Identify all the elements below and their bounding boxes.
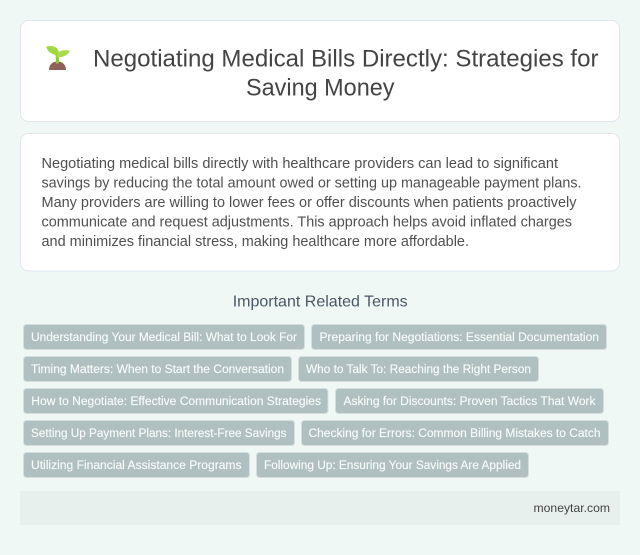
tag: how to negotiate: How to Negotiate: Effective Communication Strategies [31, 394, 321, 408]
tag: timing matters: Timing Matters: When to Start the Conversation [31, 362, 284, 376]
tag: how to negotiate [24, 388, 328, 414]
footer [20, 491, 620, 525]
tag: checking for errors: Checking for Errors: Common Billing Mistakes to Catch [308, 426, 601, 440]
tag: who to talk to: Who to Talk To: Reaching the Right Person [306, 362, 531, 376]
tag: understanding your bill: Understanding Your Medical Bill: What to Look For [31, 330, 297, 344]
tag: financial assistance [24, 452, 250, 478]
tag: preparing for negotiations: Preparing for Negotiations: Essential Documentation [320, 330, 599, 344]
panel: header [20, 20, 620, 122]
heading: related terms: Important Related Terms [233, 294, 408, 310]
title [93, 46, 599, 102]
tag: checking for errors [302, 420, 608, 446]
panel: summary text: Negotiating medical bills directly with healthcare providers can lead to significant [42, 156, 558, 172]
tag: financial assistance: Utilizing Financial Assistance Programs [31, 458, 242, 472]
tag: payment plans: Setting Up Payment Plans: Interest-Free Savings [31, 426, 286, 440]
tag: who to talk to [298, 356, 538, 382]
tag: following up [256, 452, 528, 478]
icon: seedling [46, 46, 70, 70]
panel: summary text: communicate and request adjustments. This approach helps avoid inflated charges [42, 214, 572, 230]
tag: asking for discounts [336, 388, 604, 414]
panel: summary text: Many providers are willing to lower fees or offer discounts when patients proactively [42, 195, 577, 211]
tag: timing matters [24, 356, 292, 382]
tag: asking for discounts: Asking for Discounts: Proven Tactics That Work [344, 394, 596, 408]
title: Saving Money [246, 74, 394, 102]
panel: summary text: and minimizes financial stress, making healthcare more affordable. [42, 234, 469, 250]
panel: summary text [20, 134, 620, 271]
title: Negotiating Medical Bills Directly: Strategies for [93, 46, 599, 72]
tag: preparing for negotiations [312, 324, 606, 350]
footer: moneytar.com [534, 501, 610, 515]
tag: following up: Following Up: Ensuring Your Savings Are Applied [264, 458, 521, 472]
tag: payment plans [24, 420, 294, 446]
tag: understanding your bill [24, 324, 304, 350]
panel: summary text: savings by reducing the total amount owed or setting up manageable payment plans. [42, 176, 582, 192]
tag list [24, 324, 608, 478]
